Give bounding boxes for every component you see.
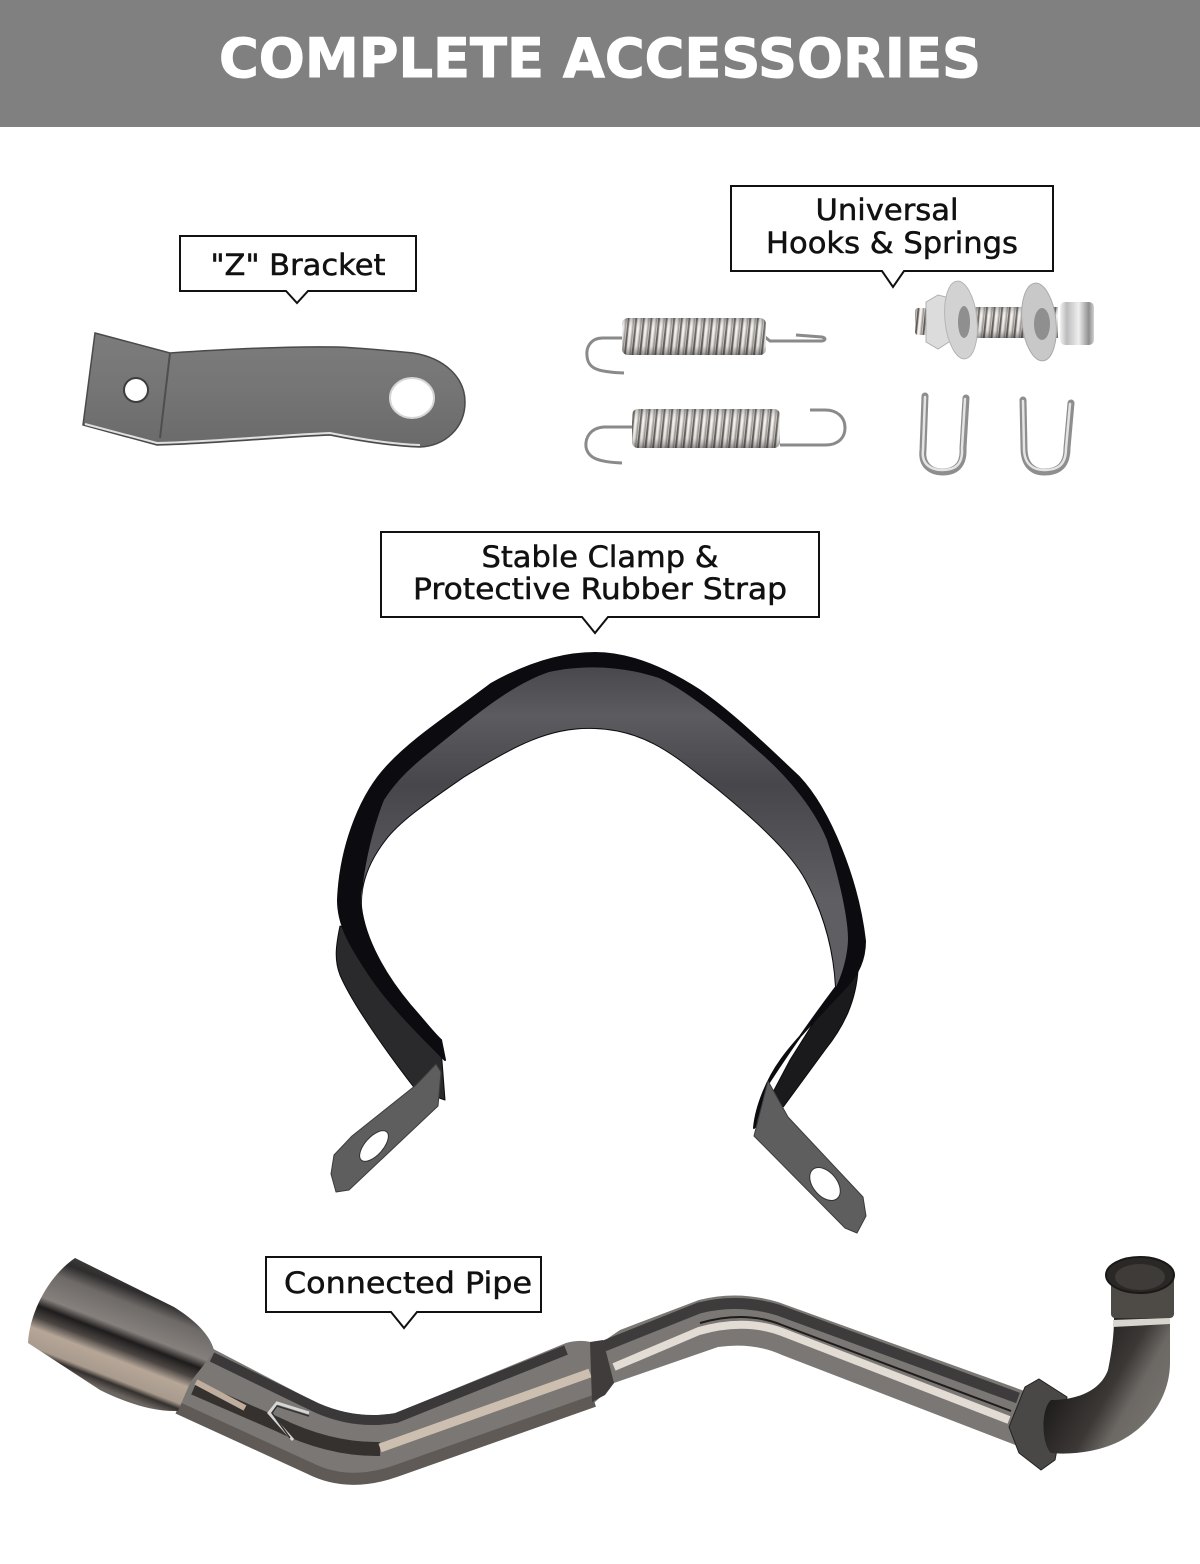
stripe right [614,1325,1009,1420]
spring 1 [587,318,825,373]
muffler tip [28,1258,214,1411]
strap back layer left [336,926,445,1100]
pipe body [165,1295,1030,1481]
small hole [124,378,148,402]
callout: clamp: Stable Clamp & [482,540,718,574]
strap back layer right [754,970,858,1128]
stripe left [380,1373,590,1448]
callout: hooks and springs: Universal [816,193,958,227]
left tab [331,1064,441,1192]
large hole [390,378,434,418]
U clip 1 [923,396,966,472]
strap inner surface [361,667,848,987]
callout: connected pipe [266,1257,541,1328]
strap black rim [338,653,865,1128]
top band left [212,1350,566,1420]
spring 2 [586,409,845,463]
joint [590,1340,614,1402]
callout: Z bracket: "Z" Bracket [210,248,386,282]
lower shading [178,1401,594,1479]
callout: clamp [381,532,819,633]
callout: hooks and springs: Hooks & Springs [766,226,1018,260]
elbow [1043,1317,1170,1454]
flange [1009,1379,1067,1470]
bolt [915,280,1094,363]
callout: connected pipe: Connected Pipe [284,1266,532,1300]
dark band left [194,1388,380,1449]
wire hook [269,1403,309,1440]
callout: Z bracket [180,236,416,303]
title: COMPLETE ACCESSORIES [219,27,981,90]
U clip 2 [1023,400,1071,472]
right tab [754,1081,866,1233]
header banner [0,0,1200,127]
callout: clamp: Protective Rubber Strap [413,572,787,606]
elbow collar [1111,1276,1174,1318]
Z bracket part [83,333,465,447]
rubber strap clamp [331,653,866,1233]
top band right [604,1303,1018,1398]
connected pipe part [28,1257,1174,1481]
callout: hooks and springs [731,186,1053,287]
